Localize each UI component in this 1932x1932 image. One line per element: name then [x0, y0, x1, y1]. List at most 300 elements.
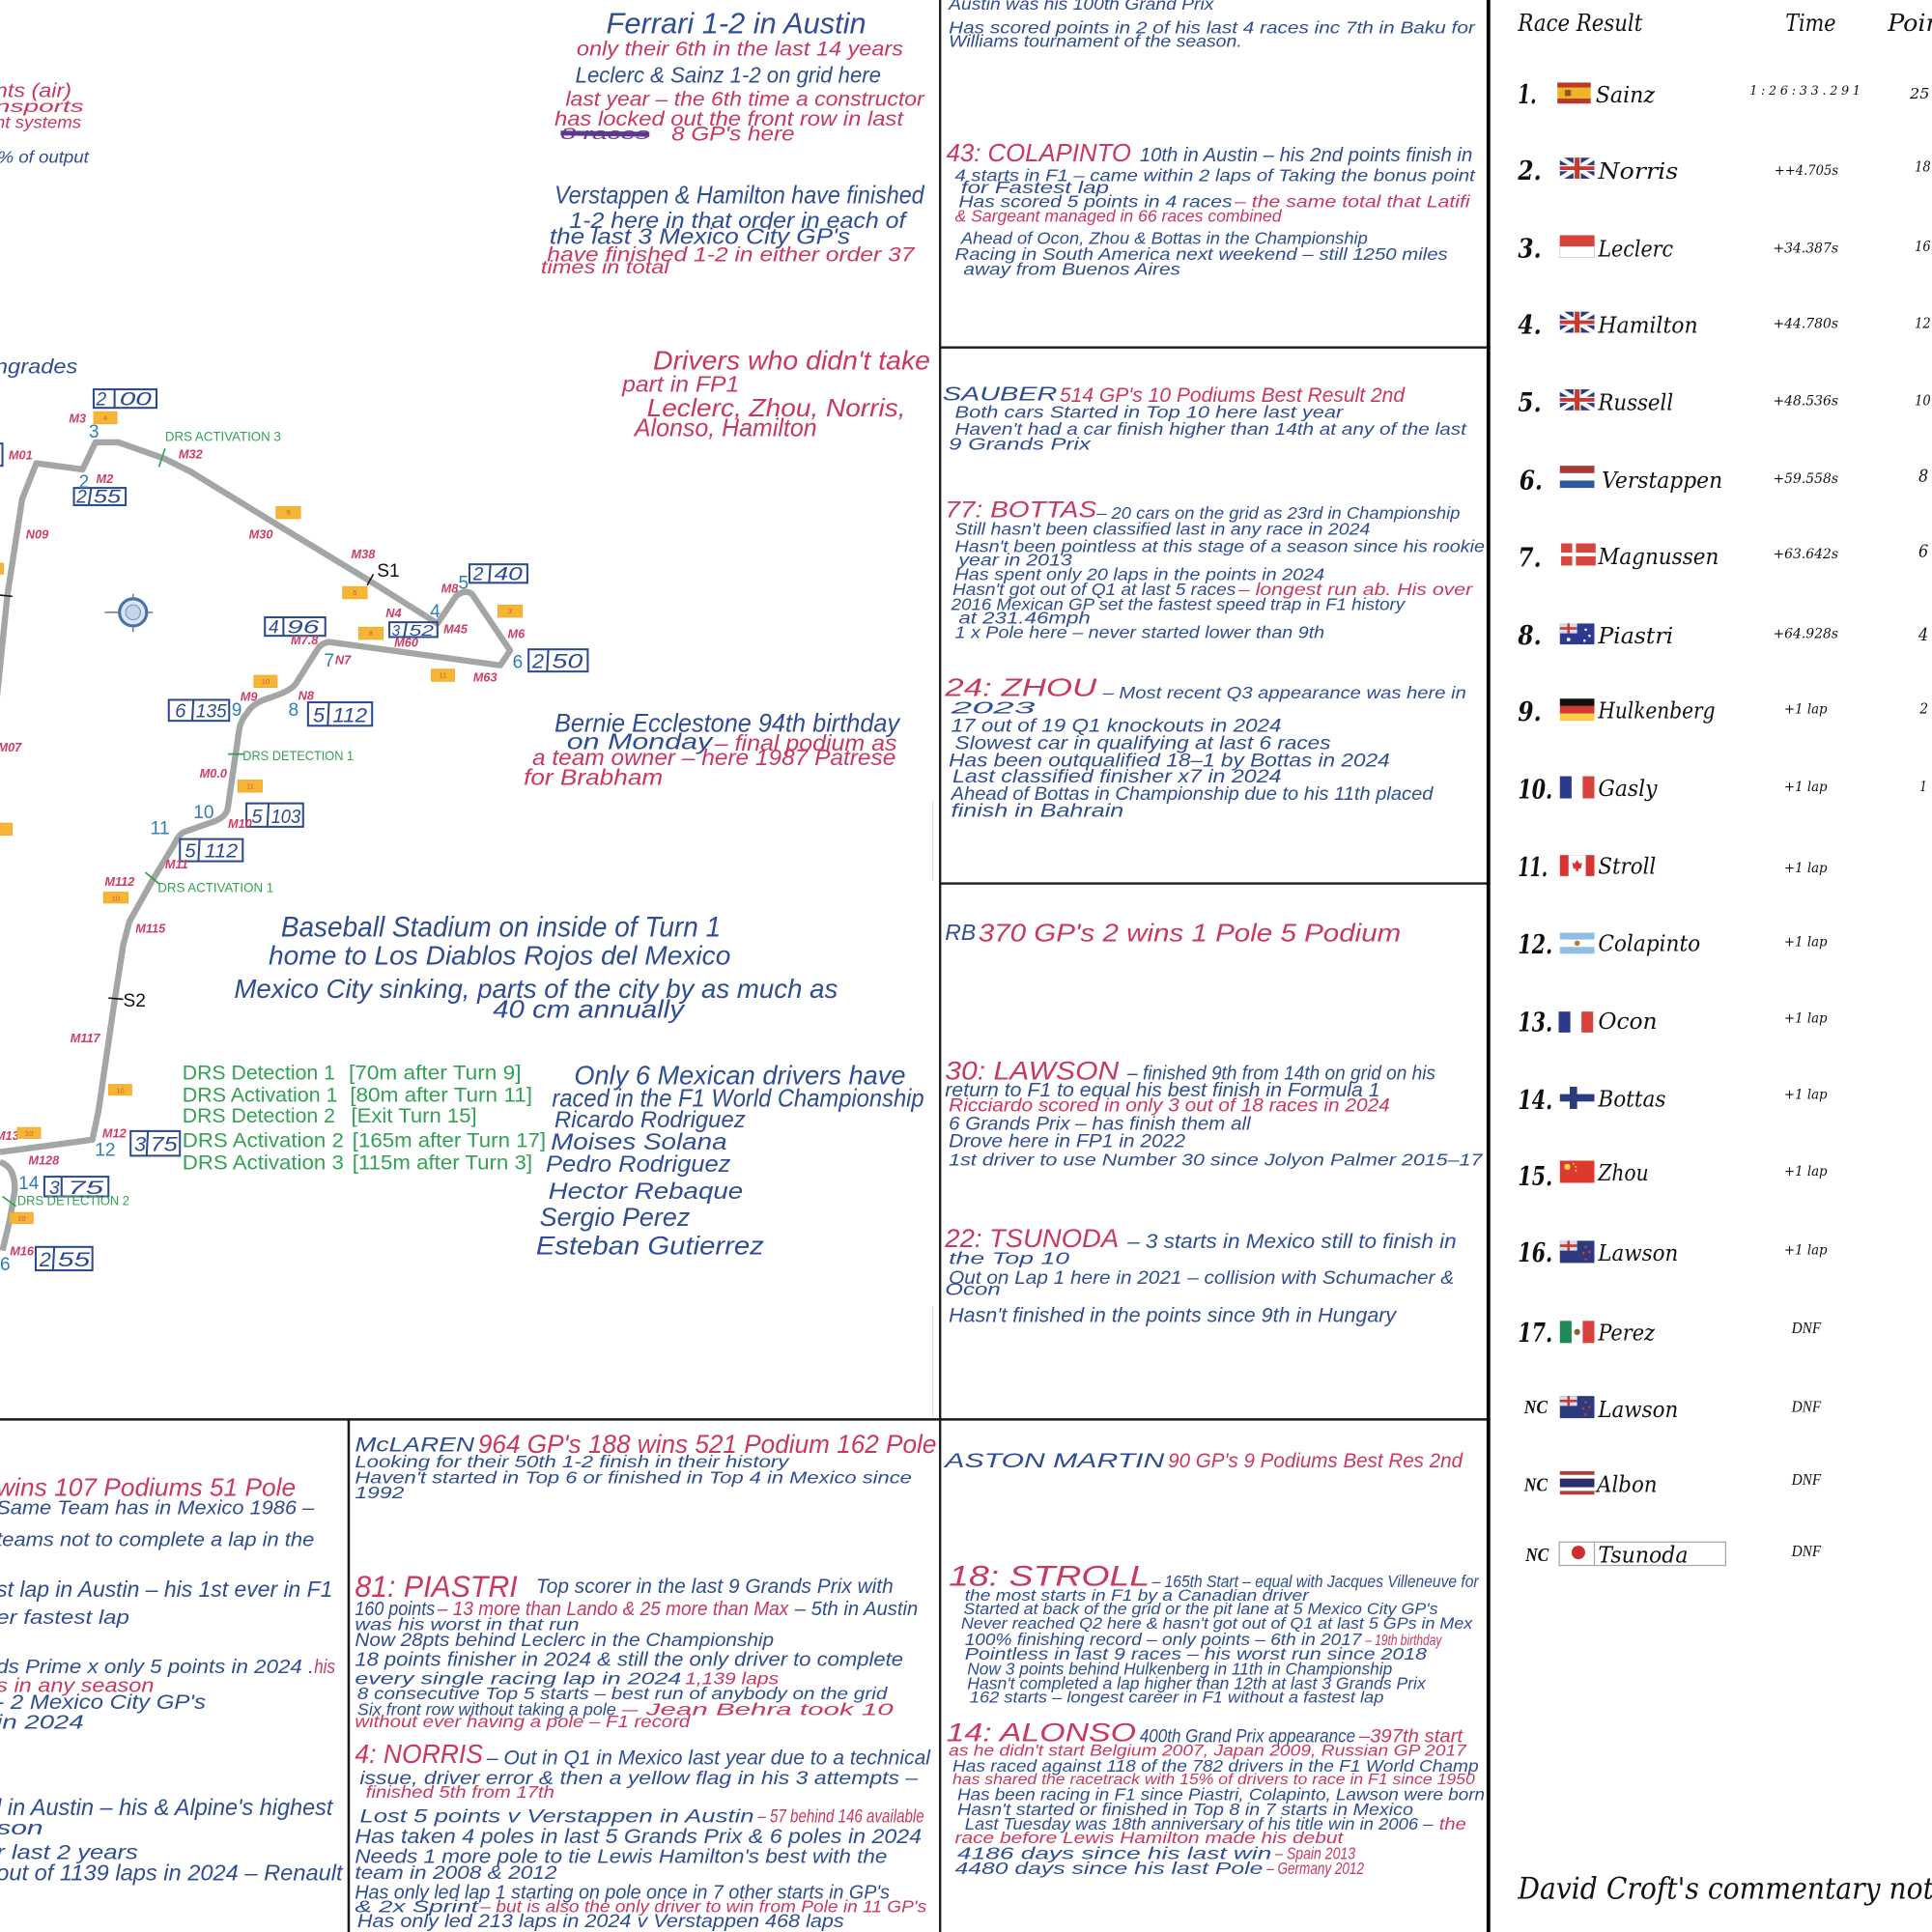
driver: Norris: Has only led lap 1 starting on pole once in 7 other starts in GP's [355, 1883, 890, 1904]
gear and speed boxes: 3 [392, 623, 401, 639]
row: 9 Hulkenberg: +1 lap [1784, 702, 1828, 718]
note: Verstappen and Hamilton: times in total [541, 258, 670, 278]
turn numbers: 8 [288, 700, 298, 721]
gear and speed boxes: 2 [531, 648, 544, 672]
row: 2 Norris [1518, 156, 1931, 186]
driver: Stroll: 162 starts – longest career in F1 without a fastest lap [970, 1689, 1383, 1707]
note: Ferrari 1-2 in Austin: Ferrari 1-2 in Austin [607, 7, 867, 40]
gear and speed boxes: 2 [39, 1247, 51, 1271]
panel: Williams notes: Williams tournament of the season. [949, 31, 1242, 50]
metre distance labels: M01 [9, 448, 33, 463]
driver: Alonso: 400th Grand Prix appearance [1140, 1727, 1355, 1747]
DRS zone table: [Exit Turn 15] [352, 1103, 477, 1127]
driver: Bottas: – 20 cars on the grid as 23rd in Championship [1095, 503, 1461, 523]
DRS zone table: [80m after Turn 11] [350, 1082, 532, 1106]
row: 17 Perez [1518, 1319, 1822, 1349]
row: NC Albon: NC [1523, 1474, 1548, 1495]
metre distance labels: M10 [228, 816, 252, 831]
DRS zone table: DRS Activation 1 [183, 1082, 337, 1106]
corner number tags: 11 [246, 781, 254, 790]
driver: Lawson: – finished 9th from 14th on grid on his [1126, 1063, 1435, 1084]
row: NC Tsunoda: DNF [1791, 1542, 1822, 1560]
row: 14 Bottas: Bottas [1597, 1087, 1665, 1112]
gear and speed boxes: 2 [472, 565, 484, 585]
turn numbers: 9 [232, 700, 242, 721]
driver: Stroll: – 165th Start – equal with Jacques Villeneuve for [1151, 1572, 1480, 1591]
heading: Aston Martin stats: 90 GP's 9 Podiums Best Res 2nd [1168, 1448, 1463, 1472]
driver: Colapinto: 43: COLAPINTO [947, 140, 1131, 167]
row: 6 Verstappen: 8 [1918, 467, 1928, 487]
note: Mexican F1 drivers: Hector Rebaque [549, 1179, 743, 1205]
gear and speed boxes: 112 [205, 841, 239, 863]
driver: Alonso [947, 1718, 1485, 1878]
panel rules [0, 0, 1489, 1932]
row: 5 Russell: 5. [1518, 388, 1542, 418]
circuit outline [0, 442, 510, 1251]
row: 14 Bottas: 14. [1518, 1086, 1552, 1116]
driver: Piastri [355, 1569, 918, 1731]
table header: Time [1785, 10, 1836, 37]
turn numbers: 6 [0, 1255, 11, 1275]
driver: Bottas [945, 497, 1485, 642]
metre distance labels: N4 [385, 606, 402, 620]
note: Bernie Ecclestone [524, 709, 901, 790]
panel: Alpine team notes: - 2 Mexico City GP's [0, 1690, 206, 1714]
driver: Lawson [945, 1056, 1484, 1170]
DRS zone table: DRS Detection 1 [183, 1060, 335, 1084]
gear and speed boxes: 135 [196, 701, 227, 722]
driver: Zhou: Ahead of Bottas in Championship due to his 11th placed [951, 784, 1435, 805]
metre distance labels: M12 [102, 1125, 127, 1140]
turn numbers: 11 [151, 819, 169, 839]
panel: Sauber notes: Haven't had a car finish higher than 14th at any of the last [955, 419, 1467, 439]
notes: top-left fragments [0, 81, 90, 378]
panel: Aston Martin notes [943, 1448, 1485, 1878]
note: baseball stadium and Mexico City sinking [234, 911, 838, 1024]
driver: Zhou: – Most recent Q3 appearance was here in [1101, 683, 1466, 702]
note: Verstappen and Hamilton [541, 182, 924, 278]
row: 8 Piastri: +64.928s [1773, 627, 1838, 642]
driver: Piastri: Top scorer in the last 9 Grands Prix with [536, 1574, 894, 1598]
panel: Williams notes [947, 0, 1476, 278]
driver: Norris: team in 2008 & 2012 [355, 1863, 557, 1884]
row: 4 Hamilton [1518, 311, 1931, 341]
row: 15 Zhou: Zhou [1597, 1161, 1649, 1186]
metre distance labels: M38 [352, 547, 376, 561]
row: 5 Russell: Russell [1597, 391, 1673, 416]
note: Verstappen and Hamilton: have finished 1-2 in either order 37 [547, 242, 916, 266]
row: 2 Norris: Norris [1597, 159, 1678, 185]
DRS zone table: DRS Activation 3 [183, 1150, 344, 1174]
gear and speed boxes: 40 [494, 565, 523, 585]
row: NC Lawson: Lawson [1597, 1398, 1678, 1423]
row: NC Albon [1523, 1470, 1822, 1498]
driver: Alonso: Has been racing in F1 since Piastri, Colapinto, Lawson were born [957, 1785, 1485, 1804]
row: 3 Leclerc [1518, 235, 1931, 265]
gear and speed boxes: 2 [95, 390, 106, 411]
metre distance labels: M9 [241, 690, 258, 704]
note: drivers who did not take part in FP1: Leclerc, Zhou, Norris, [647, 395, 905, 422]
driver: Tsunoda: – 3 starts in Mexico still to finish in [1126, 1229, 1457, 1253]
driver: Bottas: 1 x Pole here – never started lower than 9th [955, 623, 1324, 642]
note: Ferrari 1-2 in Austin: Leclerc & Sainz 1-2 on grid here [576, 62, 881, 87]
driver: Norris: Lost 5 points v Verstappen in Austin [359, 1806, 754, 1827]
driver: Tsunoda [944, 1224, 1457, 1327]
driver: Tsunoda: Hasn't finished in the points since 9th in Hungary [949, 1303, 1397, 1327]
driver: Bottas: 77: BOTTAS [945, 497, 1096, 524]
note: Verstappen and Hamilton: the last 3 Mexico City GP's [550, 224, 850, 249]
turn numbers: 14 [18, 1174, 40, 1194]
row: 10 Gasly: +1 lap [1784, 780, 1828, 795]
panel: Alpine team notes: s in any season [0, 1675, 154, 1696]
metre distance labels: M63 [473, 669, 497, 684]
driver: Zhou: 2023 [950, 698, 1036, 718]
gear and speed boxes: 112 [332, 702, 367, 726]
gear and speed boxes: 3 [134, 1131, 146, 1155]
note: Ferrari 1-2 in Austin: 8 GP's here [671, 121, 795, 145]
panel: Alpine team notes [0, 1474, 344, 1885]
driver: Zhou: finish in Bahrain [952, 802, 1123, 822]
corner number tags: 10 [112, 894, 120, 902]
driver: Norris: 4: NORRIS [355, 1739, 483, 1769]
driver: Piastri: Six front row without taking a pole [357, 1700, 616, 1719]
driver: Bottas: Has spent only 20 laps in the points in 2024 [955, 565, 1324, 584]
row: NC Lawson: DNF [1791, 1398, 1822, 1416]
metre distance labels: M8 [441, 582, 459, 596]
note: Bernie Ecclestone: – final podium as [714, 730, 897, 755]
driver: Alonso: – Germany 2012 [1265, 1859, 1364, 1878]
driver: Lawson: 30: LAWSON [945, 1056, 1120, 1085]
driver: Tsunoda: Ocon [945, 1280, 1001, 1299]
driver: Zhou: 24: ZHOU [944, 675, 1097, 702]
row: 13 Ocon: 13. [1518, 1009, 1552, 1038]
metre distance labels [0, 411, 526, 1259]
corner number tags: 6 [353, 588, 356, 597]
row: 9 Hulkenberg: Hulkenberg [1597, 699, 1716, 724]
turn numbers: 12 [95, 1140, 115, 1160]
panel: race result table [1518, 10, 1932, 1568]
driver: Tsunoda: the Top 10 [949, 1249, 1069, 1268]
panel: McLaren notes: Haven't started in Top 6 or finished in Top 4 in Mexico since [355, 1468, 912, 1488]
row: 4 Hamilton: +44.780s [1773, 316, 1838, 331]
heading: Sauber stats: SAUBER [943, 384, 1058, 406]
metre distance labels: M0.0 [200, 766, 227, 781]
driver: Tsunoda: Out on Lap 1 here in 2021 – collision with Schumacher & [949, 1268, 1454, 1289]
row: 6 Verstappen: Verstappen [1602, 469, 1722, 494]
metre distance labels: M112 [104, 874, 134, 889]
row: 2 Norris: 2. [1518, 156, 1542, 186]
driver: Zhou: 17 out of 19 Q1 knockouts in 2024 [952, 717, 1282, 737]
gear and speed boxes: 6 [175, 700, 186, 722]
row: 5 Russell [1518, 388, 1931, 418]
driver: Norris: & 2x Sprint [355, 1897, 479, 1917]
note: Ferrari 1-2 in Austin: only their 6th in the last 14 years [577, 36, 903, 60]
metre distance labels: M11 [165, 857, 188, 871]
track map [0, 389, 587, 1275]
row: 5 Russell: +48.536s [1773, 394, 1838, 410]
driver: Colapinto: & Sargeant managed in 66 races combined [955, 207, 1283, 226]
driver: Norris: finished 5th from 17th [366, 1782, 554, 1802]
metre distance labels: M45 [443, 622, 469, 637]
panel: Sauber notes [943, 383, 1485, 822]
row: 10 Gasly: Gasly [1598, 777, 1659, 802]
gear and speed boxes: 2 [75, 487, 87, 507]
row: NC Albon: Albon [1595, 1473, 1658, 1498]
panel: Alpine team notes: out of 1139 laps in 2024 – Renault [0, 1860, 344, 1885]
note: Mexican F1 drivers: Pedro Rodriguez [546, 1151, 730, 1178]
metre distance labels: M30 [249, 526, 272, 541]
row: 11 Stroll: Stroll [1598, 854, 1656, 879]
panel: Alpine team notes: teams not to complete a lap in the [0, 1530, 314, 1551]
DRS zone table: [115m after Turn 3] [353, 1150, 532, 1174]
heading: McLaren stats: 964 GP's 188 wins 521 Podium 162 Pole [478, 1430, 936, 1459]
driver: Norris [355, 1739, 931, 1932]
driver: Norris: Needs 1 more pole to tie Lewis Hamilton's best with the [355, 1847, 887, 1868]
metre distance labels: M32 [179, 446, 203, 461]
driver: Zhou: Slowest car in qualifying at last 6 races [955, 734, 1331, 754]
metre distance labels: N8 [298, 688, 315, 702]
row: 7 Magnussen: Magnussen [1597, 545, 1719, 570]
row: 8 Piastri: 4 [1918, 625, 1928, 645]
driver: Colapinto: 10th in Austin – his 2nd points finish in [1140, 145, 1472, 166]
row: 12 Colapinto: Colapinto [1598, 932, 1700, 957]
driver: Bottas: year in 2013 [956, 550, 1072, 569]
driver: Zhou: Last classified finisher x7 in 2024 [952, 767, 1282, 787]
row: 10 Gasly: 1 [1919, 778, 1927, 795]
heading: Sauber stats: 514 GP's 10 Podiums Best Result 2nd [1060, 383, 1406, 407]
row: 11 Stroll [1518, 853, 1828, 883]
driver: Piastri: 1,139 laps [685, 1669, 779, 1689]
driver: Lawson: Drove here in FP1 in 2022 [949, 1131, 1185, 1151]
row: NC Tsunoda [1524, 1542, 1822, 1568]
driver: Stroll: Started at back of the grid or the pit lane at 5 Mexico City GP's [963, 1600, 1438, 1618]
metre distance labels: M117 [71, 1031, 101, 1045]
driver: Norris: – 57 behind 146 available [757, 1806, 924, 1827]
gear and speed boxes: 52 [409, 623, 435, 639]
row: 1 Sainz: 25 [1909, 85, 1929, 102]
note: drivers who did not take part in FP1: Alonso, Hamilton [633, 415, 817, 442]
table header [1518, 10, 1932, 37]
driver: Zhou [944, 675, 1466, 822]
driver: Norris: – but is also the only driver to win from Pole in 11 GP's [479, 1897, 926, 1917]
heading: Aston Martin stats: ASTON MARTIN [943, 1448, 1165, 1472]
driver: Lawson: 6 Grands Prix – has finish them all [949, 1115, 1251, 1135]
driver: Bottas: Still hasn't been classified last in any race in 2024 [955, 520, 1370, 539]
row: NC Tsunoda: NC [1524, 1545, 1549, 1566]
panel: Alpine team notes: ds Prime x only 5 points in 2024 . [0, 1657, 314, 1678]
note: baseball stadium and Mexico City sinking: home to Los Diablos Rojos del Mexico [269, 941, 730, 971]
heading: RB stats: RB [945, 920, 976, 945]
note: Ferrari 1-2 in Austin: last year – the 6th time a constructor [565, 87, 924, 111]
gear and speed boxes [0, 389, 587, 1271]
driver: Colapinto: Has scored 5 points in 4 races [958, 191, 1233, 211]
driver: Alonso: 4480 days since his last Pole [955, 1859, 1263, 1878]
metre distance labels: M60 [394, 636, 418, 650]
gear and speed boxes: 5 [251, 807, 263, 828]
row: 3 Leclerc: Leclerc [1597, 237, 1673, 262]
panel: Alpine team notes: l in Austin – his & Alpine's highest [0, 1795, 334, 1821]
turn numbers: 4 [430, 602, 440, 622]
row: 6 Verstappen: 6. [1520, 466, 1543, 496]
gear and speed boxes: 5 [185, 841, 196, 863]
driver: Piastri: 81: PIASTRI [355, 1569, 518, 1604]
row: 12 Colapinto [1518, 930, 1828, 960]
row: 10 Gasly: 10. [1518, 776, 1552, 806]
note: Ferrari 1-2 in Austin: 8 races [560, 125, 649, 143]
corner number tags: 10 [17, 1214, 26, 1223]
row: 13 Ocon [1518, 1009, 1828, 1038]
driver: Alonso: has shared the racetrack with 15% of drivers to race in F1 since 1950 [952, 1772, 1475, 1788]
corner number tags: 10 [25, 1129, 33, 1138]
gear and speed boxes: 5 [313, 702, 326, 726]
row: 16 Lawson: +1 lap [1784, 1242, 1828, 1258]
panel: Alpine team notes: wins 107 Podiums 51 Pole [0, 1474, 296, 1501]
driver: Bottas: 2016 Mexican GP set the fastest speed trap in F1 history [951, 594, 1406, 613]
row: 16 Lawson: 16. [1518, 1238, 1552, 1268]
row: 7 Magnussen [1518, 542, 1928, 574]
row: 15 Zhou: +1 lap [1784, 1164, 1828, 1179]
DRS zone table: [165m after Turn 17] [353, 1127, 546, 1151]
turn numbers: 7 [324, 651, 334, 671]
row: 3 Leclerc: 3. [1518, 235, 1542, 265]
panel: Alpine team notes: his [314, 1657, 335, 1678]
driver: Zhou: Has been outqualified 18–1 by Bottas in 2024 [949, 751, 1390, 771]
DRS zone labels: DRS ACTIVATION 1 [157, 879, 273, 895]
DRS zone labels: DRS DETECTION 1 [242, 748, 354, 763]
row: 7 Magnussen: 7. [1518, 544, 1542, 574]
row: 6 Verstappen: +59.558s [1773, 471, 1838, 487]
row: 15 Zhou [1518, 1161, 1828, 1192]
row: 1 Sainz: Sainz [1596, 83, 1656, 108]
driver: Piastri: – Jean Behra took 10 [620, 1700, 894, 1719]
driver: Colapinto: – the same total that Latifi [1234, 191, 1471, 211]
row: 9 Hulkenberg: 9. [1518, 697, 1542, 727]
driver: Norris: Has taken 4 poles in last 5 Grands Prix & 6 poles in 2024 [355, 1824, 922, 1848]
DRS zone table [183, 1060, 546, 1174]
driver: Bottas: Hasn't got out of Q1 at last 5 races [952, 580, 1236, 599]
driver: Alonso: 14: ALONSO [947, 1718, 1136, 1747]
turn numbers: 2 [79, 472, 89, 493]
row: 17 Perez: Perez [1597, 1321, 1656, 1347]
row: 8 Piastri: Piastri [1597, 624, 1673, 649]
metre distance labels: M16 [10, 1244, 35, 1259]
driver: Bottas: at 231.46mph [958, 608, 1091, 627]
metre distance labels: M7.8 [291, 633, 319, 647]
driver: Piastri: without ever having a pole – F1 record [355, 1712, 692, 1731]
driver: Lawson: Ricciardo scored in only 3 out of 18 races in 2024 [949, 1096, 1390, 1117]
gear and speed boxes: 3 [49, 1179, 60, 1199]
row: 2 Norris: ++4.705s [1775, 163, 1838, 179]
metre distance labels: M128 [28, 1152, 60, 1167]
driver: Norris: Has only led 213 laps in 2024 v Verstappen 468 laps [357, 1912, 844, 1932]
gear and speed boxes: 103 [271, 807, 301, 828]
note: Bernie Ecclestone: a team owner – here 1987 Patrese [532, 745, 895, 770]
note: drivers who did not take part in FP1: Drivers who didn't take [653, 346, 930, 376]
driver: Stroll [949, 1561, 1480, 1707]
panel: Sauber notes: 9 Grands Prix [949, 435, 1092, 454]
row: 7 Magnussen: +63.642s [1773, 547, 1838, 562]
row: 1 Sainz: 1. [1518, 80, 1537, 110]
DRS zone labels: DRS DETECTION 2 [17, 1192, 129, 1208]
DRS zone labels: DRS ACTIVATION 3 [165, 429, 281, 444]
heading: McLaren stats: McLAREN [355, 1433, 474, 1457]
sector markers: S1 [377, 561, 400, 582]
panel: McLaren notes [355, 1430, 936, 1932]
panel: Alpine team notes: Same Team has in Mexico 1986 – [0, 1498, 315, 1520]
driver: Alonso: Last Tuesday was 18th anniversary of his title win in 2006 – [965, 1814, 1435, 1833]
turn numbers: 5 [458, 574, 469, 594]
row: 10 Gasly [1518, 776, 1927, 806]
row: 1 Sainz: 1:26:33.291 [1749, 84, 1861, 99]
driver: Norris: issue, driver error & then a yellow flag in his 3 attempts – [359, 1769, 919, 1789]
row: 17 Perez: DNF [1791, 1319, 1822, 1337]
corner number tags: 4 [103, 413, 108, 422]
DRS zone table: DRS Detection 2 [183, 1103, 335, 1127]
driver: Lawson: return to F1 to equal his best finish in Formula 1 [945, 1080, 1380, 1101]
note: Mexican F1 drivers: Only 6 Mexican drivers have [574, 1060, 906, 1090]
note: baseball stadium and Mexico City sinking: Mexico City sinking, parts of the city by as much as [234, 974, 838, 1004]
row: 1 Sainz [1518, 80, 1929, 110]
driver: Stroll: Hasn't completed a lap higher than 12th at last 3 Grands Prix [967, 1674, 1427, 1693]
row: NC Tsunoda: Tsunoda [1598, 1543, 1688, 1568]
driver: Stroll: the most starts in F1 by a Canadian driver [965, 1586, 1310, 1605]
note: Mexican F1 drivers: raced in the F1 World Championship [552, 1085, 924, 1112]
driver: Alonso: –397th start [1358, 1727, 1463, 1747]
corner number tags: 8 [369, 629, 373, 638]
driver: Piastri: every single racing lap in 2024 [355, 1669, 681, 1689]
DRS zone labels [3, 429, 354, 1208]
row: 13 Ocon: Ocon [1598, 1009, 1658, 1035]
driver: Piastri: 18 points finisher in 2024 & still the only driver to complete [355, 1649, 903, 1670]
driver: Stroll: 18: STROLL [949, 1561, 1150, 1593]
metre distance labels: N7 [335, 652, 352, 667]
icon: compass [104, 594, 153, 632]
note: Bernie Ecclestone: for Brabham [524, 765, 663, 790]
row: 3 Leclerc: +34.387s [1773, 241, 1838, 256]
driver: Piastri: 8 consecutive Top 5 starts – best run of anybody on the grid [357, 1684, 889, 1703]
row: 4 Hamilton: 4. [1518, 311, 1542, 341]
sector markers: S2 [124, 991, 146, 1011]
corner number tags: 3 [508, 607, 512, 615]
note: Bernie Ecclestone: on Monday [567, 729, 714, 754]
note: drivers who did not take part in FP1: part in FP1 [621, 372, 739, 397]
driver: Stroll: – 19th birthday [1364, 1633, 1442, 1649]
turn numbers: 10 [193, 803, 214, 823]
metre distance labels: M3 [69, 411, 86, 425]
corner number tags: 11 [440, 671, 447, 680]
driver: Piastri: Now 28pts behind Leclerc in the Championship [355, 1631, 774, 1651]
driver: Bottas: Hasn't been pointless at this stage of a season since his rookie [955, 536, 1485, 555]
driver: Colapinto: for Fastest lap [961, 178, 1109, 197]
note: Ferrari 1-2 in Austin: has locked out the front row in last [554, 106, 904, 130]
table header: Race Result [1518, 10, 1642, 37]
metre distance labels: M115 [135, 922, 166, 936]
note: Mexican F1 drivers: Ricardo Rodriguez [554, 1107, 746, 1133]
row: 17 Perez: 17. [1518, 1319, 1552, 1349]
driver: Piastri: – 5th in Austin [794, 1599, 918, 1620]
driver: Alonso: Hasn't started or finished in Top 8 in 7 starts in Mexico [957, 1800, 1413, 1819]
turn numbers [0, 422, 523, 1275]
notes: top-left fragments: % of output [0, 147, 90, 166]
note: Bernie Ecclestone: Bernie Ecclestone 94th birthday [554, 709, 901, 738]
metre distance labels: M2 [96, 471, 113, 486]
panel: McLaren notes: Looking for their 50th 1-2 finish in their history [355, 1452, 790, 1471]
driver: Colapinto [947, 140, 1476, 278]
note: Mexican F1 drivers: Moises Solana [551, 1129, 727, 1155]
panel: Williams notes: Has scored points in 2 of his last 4 races inc 7th in Baku for [949, 17, 1476, 37]
row: 11 Stroll: +1 lap [1784, 861, 1828, 876]
sector markers [0, 561, 400, 1011]
